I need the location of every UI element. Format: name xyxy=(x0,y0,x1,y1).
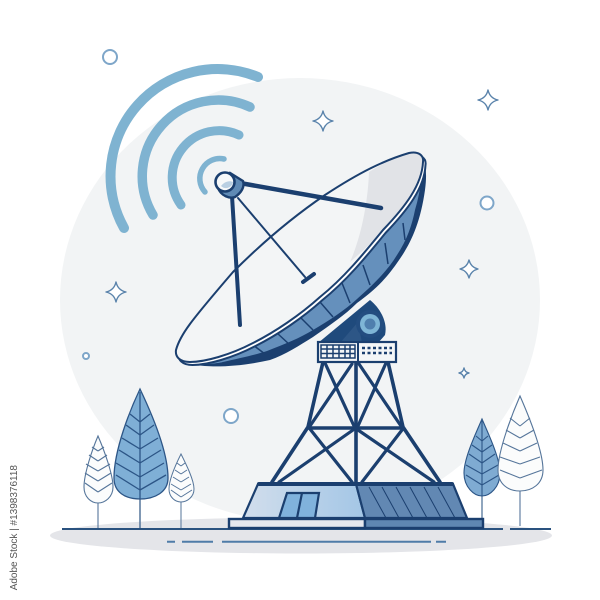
door xyxy=(279,493,319,518)
dish rim xyxy=(178,155,426,365)
tree: outline left xyxy=(84,436,113,528)
dish mount xyxy=(318,300,386,343)
background circle xyxy=(60,78,540,522)
dish face xyxy=(176,152,423,362)
plinth xyxy=(229,519,365,528)
tower xyxy=(272,362,440,483)
tree: small outline left xyxy=(169,454,194,528)
tower braces xyxy=(279,363,434,482)
dish highlight xyxy=(350,152,423,262)
dish panels xyxy=(205,180,421,364)
tree: blue right xyxy=(464,419,500,528)
ground xyxy=(50,518,552,554)
tower legs xyxy=(272,362,440,483)
dish face outline xyxy=(176,152,423,362)
equipment platform xyxy=(318,342,396,362)
signal waves xyxy=(111,69,258,228)
feed struts xyxy=(232,183,381,325)
decorative circles xyxy=(83,50,494,423)
decorative stars xyxy=(106,90,498,378)
tree: large blue left xyxy=(114,389,168,528)
dish underside xyxy=(180,158,426,366)
feed horn xyxy=(216,172,244,198)
satellite dish xyxy=(176,152,426,366)
image credit: Adobe Stock | #1398376118 xyxy=(9,465,20,590)
tree: outline right xyxy=(498,396,543,526)
roof bar xyxy=(259,482,452,486)
base building xyxy=(229,484,483,528)
